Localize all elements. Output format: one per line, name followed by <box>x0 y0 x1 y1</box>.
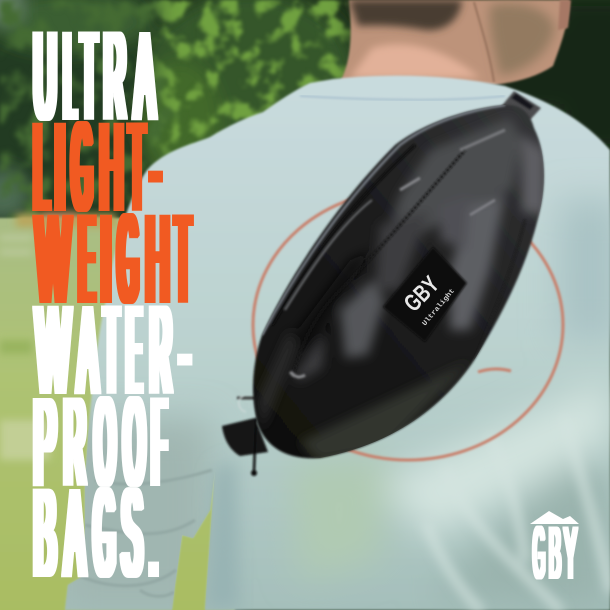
ULTRA: T <box>82 7 96 146</box>
headline: - <box>151 98 160 237</box>
headline: O <box>124 373 145 512</box>
logo letters: B <box>549 513 561 594</box>
WATER-: A <box>78 281 98 420</box>
BAGS.: A <box>65 464 85 603</box>
ULTRA: L <box>64 7 76 146</box>
logo roof <box>530 511 579 524</box>
PROOF: R <box>64 373 85 512</box>
poster: bag photo with headline: H <box>146 190 169 329</box>
WATER-: E <box>127 281 141 420</box>
patch small text: Ultralight <box>421 288 457 328</box>
shirt <box>60 76 610 610</box>
WATER-: W <box>36 281 70 420</box>
headline: S <box>122 464 142 603</box>
GBY logo <box>530 511 579 594</box>
bag brand patch <box>383 247 467 342</box>
logo letters: G <box>533 513 545 594</box>
WEIGHT: I <box>100 190 112 329</box>
poster: bag photo with headline: - <box>180 281 190 420</box>
ULTRA: R <box>104 7 125 146</box>
WEIGHT: G <box>118 190 138 329</box>
man's head and neck <box>340 0 571 85</box>
headline: . <box>149 464 158 603</box>
PROOF: P <box>34 373 56 512</box>
ULTRA: U <box>34 7 56 146</box>
WEIGHT: E <box>79 190 94 329</box>
WEIGHT: W <box>36 190 70 329</box>
WATER-: T <box>104 281 118 420</box>
bag strap buckle <box>500 91 541 120</box>
headline: A <box>135 7 155 146</box>
LIGHT-: I <box>54 98 66 237</box>
headline: F <box>152 373 166 512</box>
LIGHT-: H <box>100 98 123 237</box>
faded circle print on shirt <box>253 190 563 460</box>
black waterproof sling bag <box>253 105 545 462</box>
poster: bag photo with headline: T <box>176 190 190 329</box>
LIGHT-: G <box>72 98 92 237</box>
headline <box>34 7 190 603</box>
BAGS.: B <box>34 464 56 603</box>
headline: T <box>130 98 144 237</box>
poster: bag photo with headline: R <box>150 281 171 420</box>
PROOF: O <box>95 373 115 512</box>
LIGHT-: L <box>34 98 49 237</box>
patch logo text: GBY <box>399 271 445 317</box>
waist strap and cord <box>222 396 268 476</box>
BAGS.: G <box>94 464 115 603</box>
